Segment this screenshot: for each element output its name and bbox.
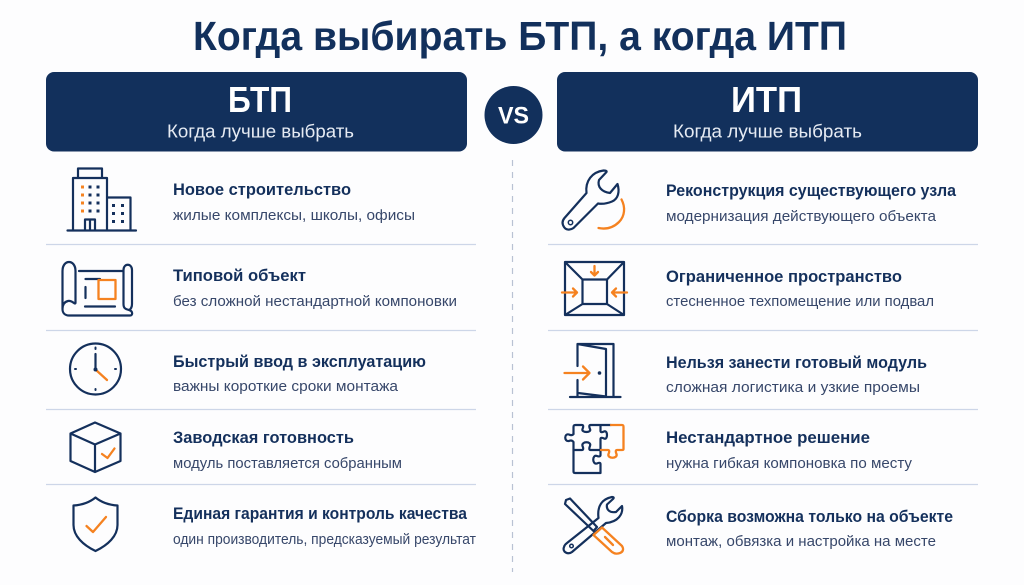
VS badge [484, 86, 542, 144]
row: Ограниченное пространство [562, 262, 934, 315]
row: Нестандартное решение: нужна гибкая компоновка по месту [666, 456, 913, 472]
VS badge: VS [498, 102, 529, 130]
icon part: wrench [564, 497, 622, 553]
row: Нестандартное решение: Нестандартное решение [666, 428, 870, 447]
panel header: ИТП [557, 72, 978, 152]
row: Нельзя занести готовый модуль [564, 344, 927, 397]
icon: puzzle [565, 425, 624, 473]
row: Новое строительство: жилые комплексы, школы, офисы [173, 208, 415, 224]
row: Единая гарантия и контроль качества [74, 498, 476, 551]
row: Нельзя занести готовый модуль: Нельзя занести готовый модуль [666, 353, 927, 372]
panel header: ИТП: ИТП [731, 79, 802, 120]
icon part: screwdriver handle [594, 528, 623, 554]
icon part: screwdriver shaft [565, 498, 597, 531]
row: Типовой объект [62, 262, 457, 316]
row: Типовой объект: без сложной нестандартной компоновки [173, 294, 457, 310]
icon: shield with check [74, 498, 118, 551]
panel header: БТП: БТП [228, 79, 292, 120]
row: Реконструкция существующего узла [563, 170, 957, 230]
row: Нестандартное решение [565, 425, 913, 473]
row: Сборка возможна только на объекте [564, 497, 953, 554]
row: Ограниченное пространство: стесненное техпомещение или подвал [666, 294, 934, 310]
row: Сборка возможна только на объекте: монтаж, обвязка и настройка на месте [666, 534, 936, 550]
row: Быстрый ввод в эксплуатацию: Быстрый ввод в эксплуатацию [173, 352, 426, 371]
row: Нельзя занести готовый модуль: сложная логистика и узкие проемы [666, 380, 920, 396]
icon: wrench with arc [563, 170, 624, 230]
row: Новое строительство: Новое строительство [173, 180, 351, 199]
row: Единая гарантия и контроль качества: один производитель, предсказуемый результат [173, 532, 476, 548]
row: Быстрый ввод в эксплуатацию: важны короткие сроки монтажа [173, 379, 399, 395]
row: Сборка возможна только на объекте: Сборка возможна только на объекте [666, 507, 953, 526]
row: Быстрый ввод в эксплуатацию [70, 344, 426, 395]
row: Заводская готовность: Заводская готовность [173, 428, 354, 447]
icon: clock [70, 344, 121, 394]
row: Заводская готовность [70, 422, 402, 472]
icon: door with arrow [564, 344, 620, 397]
icon: box with check [70, 422, 120, 472]
icon: buildings [68, 168, 136, 230]
title: Когда выбирать БТП, а когда ИТП [193, 13, 847, 59]
row: Ограниченное пространство: Ограниченное пространство [666, 267, 902, 286]
row: Реконструкция существующего узла: модернизация действующего объекта [666, 209, 937, 225]
row: Новое строительство [68, 168, 415, 230]
icon: crossed tools [564, 497, 623, 554]
row: Реконструкция существующего узла: Реконструкция существующего узла [666, 181, 957, 200]
panel header: БТП [46, 72, 467, 152]
row: Типовой объект: Типовой объект [173, 266, 306, 285]
icon: compressed room [562, 262, 627, 315]
row: Заводская готовность: модуль поставляется собранным [173, 456, 402, 472]
panel header: БТП: Когда лучше выбрать [167, 122, 354, 142]
icon: blueprint [62, 262, 132, 316]
panel header: ИТП: Когда лучше выбрать [673, 122, 862, 142]
row: Единая гарантия и контроль качества: Единая гарантия и контроль качества [173, 504, 467, 523]
